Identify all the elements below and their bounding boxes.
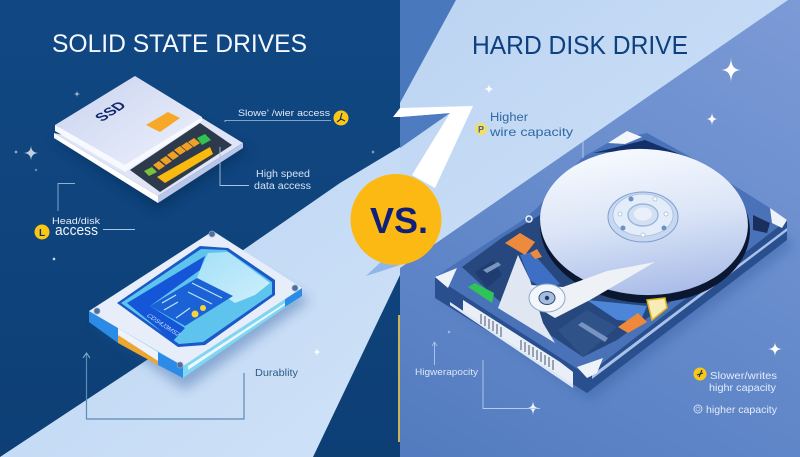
- decorative stars: [14, 57, 782, 416]
- callout: higher write capacity: wire capacity: [489, 125, 573, 139]
- interior cavity: [462, 215, 680, 357]
- glass: [197, 252, 270, 303]
- window frame: [117, 246, 275, 347]
- callout: higher write capacity: Higher: [490, 112, 528, 124]
- spindle hub: [608, 192, 678, 242]
- module label text: CDS4J3MS2: [144, 313, 182, 338]
- title: hard disk drive: HARD DISK DRIVE: [472, 30, 688, 60]
- disk platter: [536, 144, 752, 300]
- yellow controller bar: [157, 147, 213, 183]
- callout: higher capacity right: higher capacity: [706, 404, 778, 416]
- dark blue band: [127, 256, 205, 341]
- callout: slower writer access: [225, 108, 348, 126]
- callout: head/disk access: Head/disk: [52, 216, 100, 227]
- orange magnet block: [505, 233, 535, 255]
- illustration: open SSD: [54, 76, 250, 210]
- callout: higher write capacity: [475, 112, 573, 139]
- callout: higher capacity left: [415, 342, 540, 408]
- illustration: hard disk drive: [435, 131, 795, 400]
- callout: durability: [83, 353, 299, 419]
- read/write arm: [530, 262, 655, 318]
- divider: yellow vertical line: [398, 315, 400, 442]
- callout: high speed data access: High speed: [256, 169, 310, 180]
- callout: higher capacity left: Higwerapocity: [415, 367, 478, 378]
- callout: high speed data access: [220, 147, 311, 192]
- memory chips row: [153, 138, 200, 170]
- green chip: [468, 283, 494, 303]
- VS badge: [350, 174, 442, 276]
- callout: slower writes high capacity: highr capacity: [709, 382, 777, 394]
- VS badge: VS.: [370, 200, 428, 241]
- callout: head/disk access: access: [55, 222, 98, 239]
- arm pivot: [529, 284, 565, 312]
- callout: high speed data access: data access: [254, 181, 311, 192]
- chassis top face: [435, 133, 787, 375]
- corner plates: [435, 268, 457, 288]
- mounting screws: [94, 231, 298, 368]
- callout: slower writer access: Slowe' /wier access: [238, 108, 330, 119]
- yellow flex connector: [647, 298, 667, 320]
- orange label: [146, 112, 180, 132]
- title: solid state drives: SOLID STATE DRIVES: [52, 30, 307, 58]
- white arrow shape behind VS: [393, 106, 473, 188]
- gold edge connector: [118, 335, 158, 365]
- connector pins: [481, 314, 553, 370]
- actuator coil block: [475, 260, 502, 288]
- right corner slot and plate: [753, 215, 770, 233]
- callout: durability: Durablity: [255, 367, 299, 379]
- callout: head/disk access: [34, 184, 135, 240]
- silver actuator plate: [498, 255, 555, 343]
- blue voice coil patch: [520, 252, 560, 290]
- top corner plate: [593, 140, 687, 157]
- orange component: [618, 313, 647, 333]
- green chips: [144, 167, 157, 176]
- circuit board panel: [150, 278, 233, 326]
- rear connector strip: [463, 300, 573, 385]
- lower platter and black edge: [536, 148, 754, 308]
- illustration: closed SSD module: [89, 231, 310, 390]
- callout: higher write capacity: P: [478, 124, 484, 134]
- callout: slower writes high capacity: [694, 368, 777, 394]
- callout: head/disk access: L: [39, 228, 45, 239]
- SSD lid lettering: SSD: [92, 99, 130, 124]
- chassis side walls: [435, 220, 787, 393]
- callout: slower writes high capacity: Slower/writes: [710, 370, 777, 382]
- chassis screw: [526, 216, 532, 222]
